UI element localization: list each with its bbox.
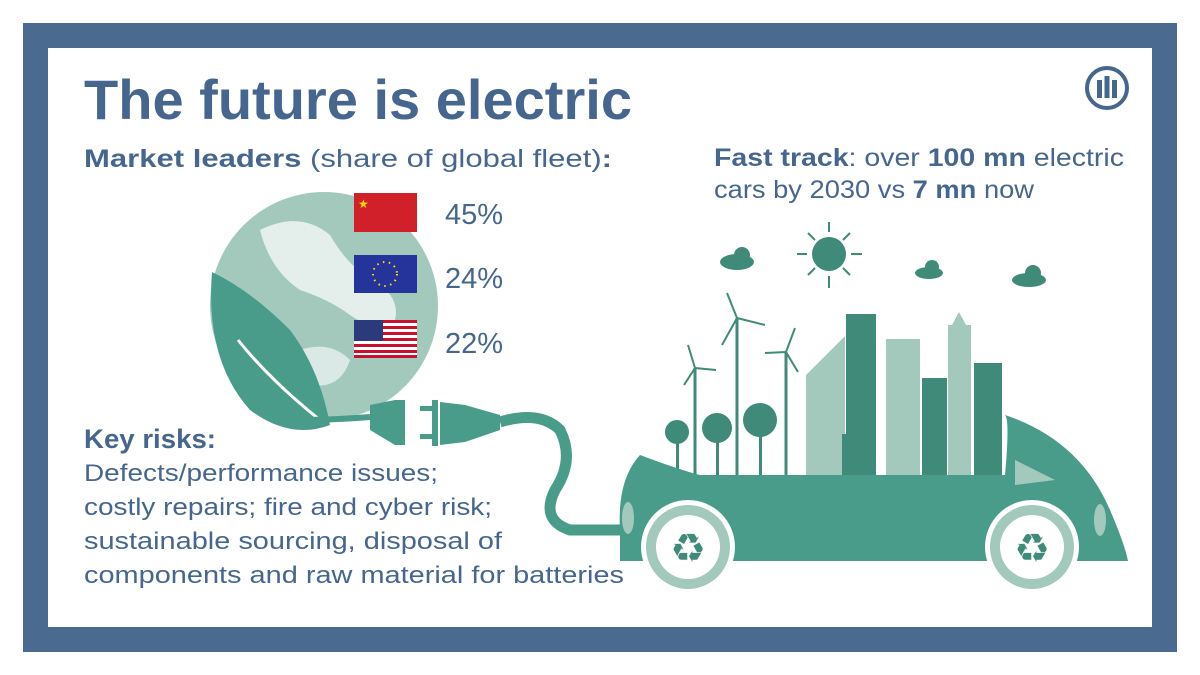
heading: market leaders: Market leaders (share of global fleet) : (84, 145, 612, 173)
key risks (84, 424, 624, 589)
title: The future is electric (84, 68, 632, 131)
globe with leaf (210, 192, 438, 430)
percentages: 22% (445, 328, 503, 360)
fast track text (714, 144, 1124, 204)
flag: China (354, 193, 417, 232)
fast track text: cars by 2030 vs 7 mn now (714, 176, 1035, 204)
percentages: 24% (445, 263, 503, 295)
flag: China: ★ (358, 197, 369, 211)
sun and clouds (720, 222, 1046, 288)
plug and cable (300, 400, 625, 530)
car (620, 415, 1128, 594)
key risks: sustainable sourcing, disposal of (84, 528, 502, 555)
city: turbines, trees, buildings (665, 293, 1002, 475)
percentages: 45% (445, 199, 503, 231)
wheel: front: ♻ (670, 527, 706, 571)
flag: USA (354, 320, 417, 358)
flag: EU (354, 255, 417, 293)
percentages (445, 199, 503, 360)
key risks: costly repairs; fire and cyber risk; (84, 494, 492, 521)
fast track text: Fast track : over 100 mn electric (714, 144, 1124, 172)
wheel: rear: ♻ (1014, 527, 1050, 571)
key risks: components and raw material for batteries (84, 562, 624, 589)
wheel: rear (985, 500, 1079, 594)
key risks: Key risks: (84, 424, 216, 454)
wheel: front (641, 500, 735, 594)
logo (1087, 68, 1127, 108)
key risks: Defects/performance issues; (84, 460, 438, 487)
